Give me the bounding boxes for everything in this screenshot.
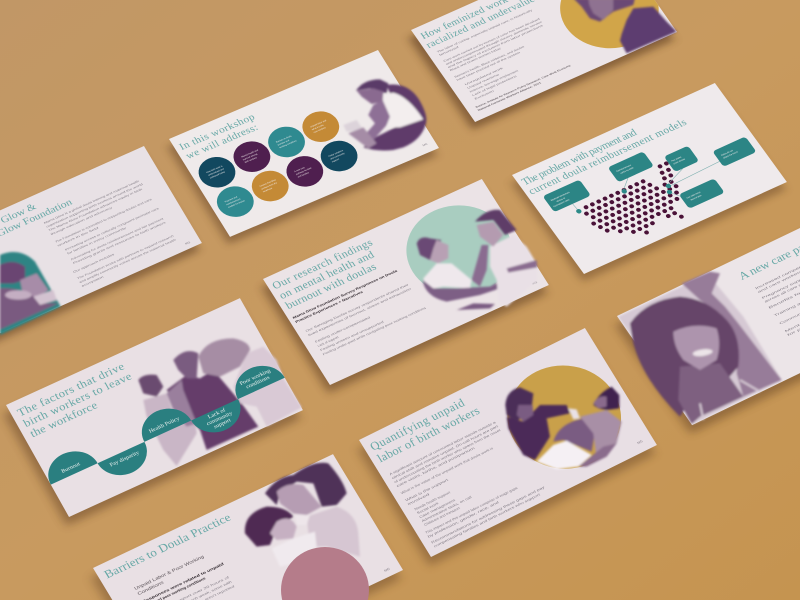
title: The factors that drive — [15, 360, 127, 419]
factor labels: Poor working — [239, 368, 272, 387]
bullet list — [754, 245, 800, 337]
mint circle — [388, 189, 531, 312]
topic circles — [192, 106, 365, 222]
body text: of undercounting the birth worker who spans from the onset — [393, 428, 501, 484]
factor labels: Burnout — [61, 461, 82, 475]
body text: A significant amount of uncounted labor stands outside a — [389, 420, 497, 476]
body text: through education and advocacy — [50, 205, 113, 236]
body text — [305, 282, 427, 357]
topic circles: Barriers to doula — [275, 134, 293, 144]
topic circles: Mental health and — [241, 149, 260, 158]
topic circles: reimbursement — [226, 198, 242, 206]
slide: Mama Glow foundation — [0, 146, 205, 348]
topic circles: Payment and — [224, 195, 239, 203]
body text: Advocating for doula reimbursement and fair payment — [70, 217, 164, 261]
subheading: Unpaid Labor & Poor Working — [133, 554, 206, 592]
callout boxes: Reimbursement — [616, 164, 632, 173]
callout boxes — [543, 112, 771, 256]
title: The problem with payment and — [520, 128, 640, 188]
footnote: Source: Institute for Women's Policy Research, Care Work Economy — [475, 64, 572, 109]
body text: Unpaid overtime — [466, 72, 501, 90]
topic circles: undervalued and — [207, 167, 225, 177]
logo mark: MG — [531, 280, 539, 286]
topic circles: care workers — [313, 126, 326, 134]
topic circles: How birth work is — [206, 165, 223, 174]
logo mark: MG — [383, 567, 391, 573]
body text: The Foundation is committed to supporting doulas and care — [54, 197, 153, 244]
bullet list: across all care settings — [764, 276, 800, 304]
footnote: National Domestic Workers Alliance, 2021 — [477, 81, 543, 112]
body text: The labor of caring, especially unpaid care, is historically — [436, 8, 534, 54]
body text: compensating families and birth workers who support — [433, 493, 541, 548]
topic circles: working conditions — [279, 139, 297, 149]
factor labels — [58, 368, 286, 495]
body text: Needs health support — [414, 490, 451, 511]
callout boxes: Medicaid reimburses — [550, 191, 571, 202]
factor labels: Health Policy — [148, 416, 181, 435]
gold circle — [560, 0, 659, 48]
photo: doula with client in circle — [343, 79, 426, 150]
title: labor of birth workers — [375, 403, 482, 465]
body text — [436, 8, 568, 102]
title: Barriers to Doula Practice — [102, 510, 234, 581]
slide: Barriers to Doula Practice — [87, 454, 407, 600]
subheading: Conditions — [136, 580, 166, 597]
body text: lived experiences of burnout, stress and exhaustion — [307, 287, 412, 337]
body text: have been pushed out of the system — [456, 50, 522, 82]
topic circles: burnout among — [242, 152, 259, 161]
logo mark: MG — [184, 240, 192, 246]
body text: Feeling under-compensated — [314, 315, 371, 344]
body text: for families in every community — [66, 226, 127, 255]
body text: and amplify community voices across the maternal health — [78, 238, 177, 284]
title: burnout with doulas — [284, 261, 379, 312]
topic circles: birth workers — [244, 156, 258, 164]
title: current doula reimbursement models — [527, 118, 689, 197]
footnote — [475, 64, 574, 112]
body text: feminized — [438, 45, 460, 57]
body text: clinical shift and remains unpaid. On-call hours are part — [391, 424, 499, 480]
topic circles: support — [331, 158, 340, 163]
body text: Increasing access to culturally congruent perinatal care — [64, 206, 160, 251]
pink circle — [281, 547, 369, 600]
photo: nurse with pregnant patient — [505, 387, 622, 469]
body text: Childcare and transport — [423, 506, 461, 527]
body text: ecosystem — [81, 275, 105, 288]
topic circles: and families — [298, 172, 310, 178]
callout boxes: varies by state — [620, 166, 635, 175]
dot map of the USA — [579, 163, 700, 248]
slide: The factors that drive birth workers — [0, 298, 306, 526]
topic circles: pathway for birth — [295, 166, 313, 176]
topic circles: workers from the — [261, 181, 279, 190]
callout boxes: doulas at — [556, 197, 566, 203]
photo: mother and child — [245, 463, 360, 567]
body text: Social work — [416, 501, 440, 515]
callout boxes: Rates do not — [720, 149, 734, 157]
body text: Care work carried out by women of color has been devalued — [442, 17, 541, 63]
slide: In this workshop — [164, 50, 442, 245]
topic circles: models for doulas — [228, 199, 245, 209]
photo: woman with raised arm — [618, 272, 782, 424]
title: we will address: — [184, 123, 260, 161]
body text: Administrative tasks, on call — [421, 495, 473, 523]
callout boxes: reflect the hours — [722, 150, 739, 160]
topic circles: and community — [330, 152, 346, 160]
body text: What is the value of the unpaid work that doula work is — [400, 446, 494, 495]
bullet list: and care workers — [757, 269, 800, 294]
photo: three birth workers — [138, 338, 302, 466]
logo mark: MG — [636, 439, 644, 445]
photo: doula and pregnant client — [417, 210, 537, 310]
subheading — [133, 554, 209, 597]
topic circles: Unpaid labor and — [310, 119, 328, 128]
gold circle — [487, 347, 642, 487]
callout boxes: inconsistent rates — [553, 198, 571, 208]
body text: Recommendations for addressing these gaps and pay — [431, 485, 546, 545]
highlighted state dots — [575, 171, 676, 231]
topic circles: workforce — [262, 187, 274, 193]
wave of factor semicircles — [40, 358, 296, 505]
body text — [141, 561, 228, 600]
title — [15, 360, 140, 440]
topic circles: A new care — [294, 166, 306, 173]
title: the workforce — [28, 399, 100, 440]
body text: Lack of support — [317, 335, 339, 348]
slide: Our research findings — [258, 179, 553, 393]
title: on mental health and — [277, 249, 377, 302]
body text: care visits, births, and postpartum — [396, 446, 476, 488]
factor labels: Pay disparity — [109, 450, 141, 468]
title — [270, 237, 388, 312]
body text: Insecure, low-wage employment — [469, 69, 519, 93]
subheading: Mama Glow Foundation Survey Responses on Doula — [292, 269, 398, 320]
factor labels: conditions — [245, 375, 272, 390]
slide: A new care pathway — [611, 203, 800, 434]
photo: woman on gold circle — [573, 0, 677, 53]
title: birth workers to leave — [21, 370, 134, 430]
topic circles: what it costs — [311, 124, 324, 131]
topic circles: practice and — [277, 139, 291, 146]
callout boxes: cover doulas — [673, 157, 687, 165]
topic circles: Factors that drive — [259, 178, 277, 188]
factor labels: community — [206, 411, 234, 427]
body text: organization supporting birth workers around the world — [45, 182, 144, 229]
body text: and undercompensated through slavery, domestic service — [445, 20, 543, 66]
body text: involved — [407, 492, 430, 506]
title: Quantifying unpaid — [367, 396, 467, 453]
body text — [43, 178, 181, 288]
body text: Feeling under-paid while navigating poor working conditions — [322, 306, 427, 356]
body text: What is the support — [405, 478, 449, 502]
topic circles: Policy solutions — [328, 149, 344, 158]
bullet list — [160, 575, 235, 600]
topic circles: underpaid today — [209, 170, 227, 179]
body text: and the legacy of exclusion from labor protections — [447, 23, 544, 69]
factor labels: support — [213, 418, 232, 430]
body text: Our approach includes — [72, 252, 116, 274]
subheading — [292, 269, 401, 324]
callout boxes: second jobs — [690, 195, 703, 201]
body text: Feeling unseen and unsupported — [319, 320, 385, 352]
slide: The problem with payment — [507, 83, 791, 282]
callout arrows — [572, 142, 732, 237]
photo: parent and child in teal arch — [0, 252, 61, 335]
body text: The Mama Glow Foundation advances equity in birth — [48, 187, 143, 232]
body text: workers in the field — [57, 226, 100, 247]
factor labels: Lack of — [207, 407, 227, 420]
title: Our research findings — [270, 237, 375, 292]
body text: Women's health, Black midwives, and doulas — [454, 44, 526, 79]
body text: Unregulated work — [464, 66, 505, 86]
slide: How feminized work — [405, 0, 684, 130]
body text: Black and brown women today — [449, 46, 502, 72]
subheading: Practice Experiences + Narratives — [295, 290, 364, 324]
body text: Case management — [419, 498, 456, 519]
body text: Mama Glow is a global doula training and maternal health — [43, 179, 140, 225]
body text: by profession, gender, race, and — [427, 500, 500, 539]
callout boxes: Low rates force — [686, 191, 702, 200]
logo mark: MG — [422, 142, 429, 147]
body text: Exclusion — [474, 89, 495, 101]
body text — [389, 417, 548, 548]
callout boxes: Few states — [671, 155, 683, 163]
title: In this workshop — [178, 112, 257, 153]
body text: Providing grants and resources to birth workers — [72, 220, 167, 265]
body text: This impact and this unpaid labor comprise of wage gaps — [425, 486, 519, 535]
body text: Lack of legal protections — [471, 74, 518, 97]
body text: The Foundation works with partners to expand research — [76, 234, 175, 280]
body text: Our Salvaging Doulas survey respondents shared their — [305, 283, 409, 333]
slide: Quantifying unpaid labor — [353, 328, 661, 566]
